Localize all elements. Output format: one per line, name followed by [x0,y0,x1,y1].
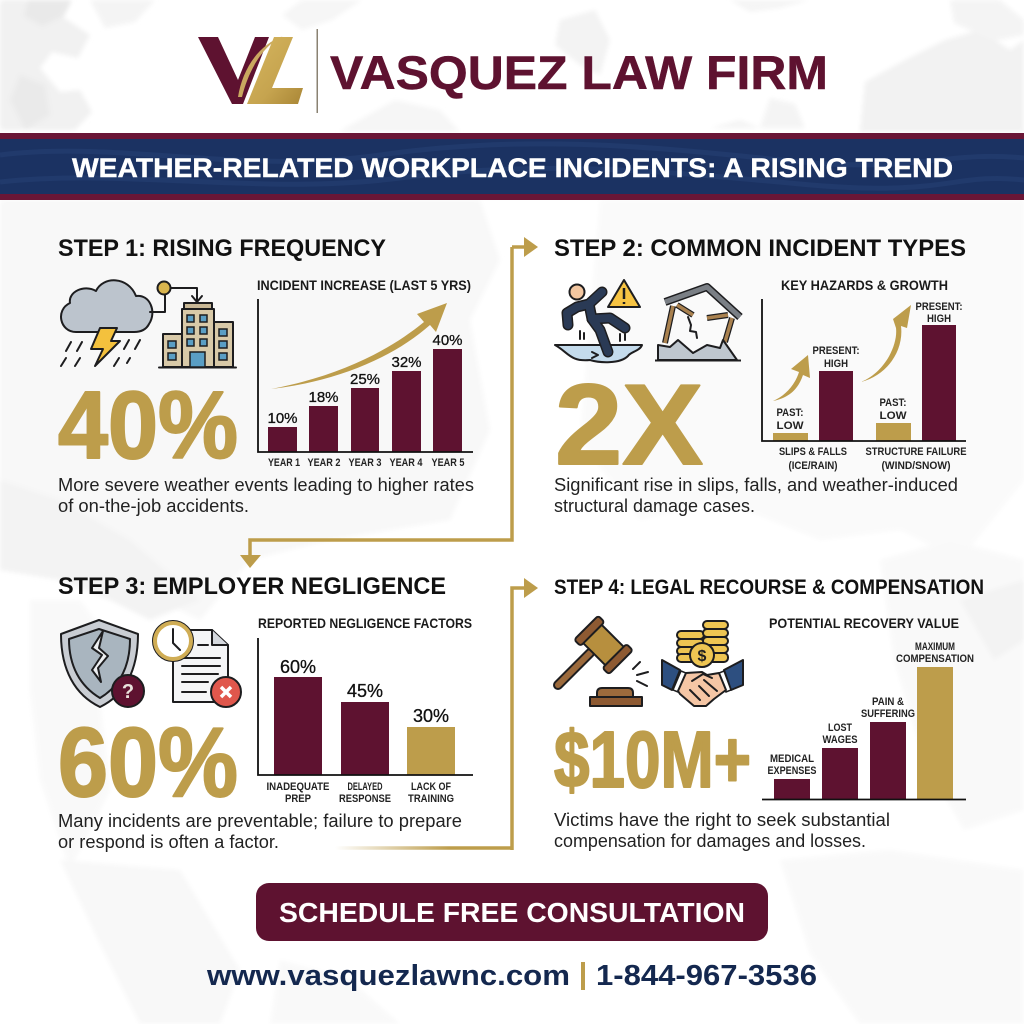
firm name: VASQUEZ LAW FIRM [330,46,828,99]
bar chart: incident increase: 25% [350,371,380,388]
bar chart: negligence factors: RESPONSE [339,793,391,805]
step 3 heading: STEP 3: EMPLOYER NEGLIGENCE [58,573,446,600]
bar chart: recovery value: SUFFERING [861,708,915,720]
logo V [198,37,269,104]
bar chart: recovery value: PAIN & [872,696,904,708]
bar chart: key hazards: STRUCTURE FAILURE [866,446,966,458]
step 2 description: Significant rise in slips, falls, and weather-induced [554,475,958,495]
panel: step 3 [58,573,473,852]
bar chart: key hazards: PAST: [776,407,804,419]
bar chart: key hazards: (WIND/SNOW) [882,460,951,472]
step 3 description: Many incidents are preventable; failure to prepare [58,811,462,831]
step 4 heading: STEP 4: LEGAL RECOURSE & COMPENSATION [554,576,984,599]
step 1 description: More severe weather events leading to higher rates [58,475,474,495]
bar chart: key hazards: HIGH [927,313,951,325]
step 2 description: structural damage cases. [554,496,755,516]
panel: step 4 [554,576,984,851]
icon: cracked shield with question badge [61,620,144,707]
icon: person slipping with warning [555,280,642,362]
icon: coins and handshake [662,621,743,706]
step 2 heading: STEP 2: COMMON INCIDENT TYPES [554,235,966,262]
bar chart: key hazards: PRESENT: [812,345,860,357]
bar chart: negligence factors: 30% [413,706,449,726]
bar chart: negligence factors: TRAINING [408,793,454,805]
bar chart: incident increase: YEAR 5 [432,457,464,469]
flow arrow: step 1 to 2 and 2 to 3 [240,237,538,568]
bar chart: negligence factors: DELAYED [348,781,383,793]
panel: step 2 [554,235,966,516]
chart heading: REPORTED NEGLIGENCE FACTORS [258,615,472,631]
banner title: WEATHER-RELATED WORKPLACE INCIDENTS: A RISING TREND [72,153,953,183]
icon: late document with clock [153,621,241,707]
bar chart: recovery value: MAXIMUM [915,641,955,653]
button label: SCHEDULE FREE CONSULTATION [279,897,745,928]
bar chart: key hazards: HIGH [824,358,848,370]
bar chart: negligence factors [258,638,473,805]
step 4 description: Victims have the right to seek substantial [554,810,890,830]
bar chart: incident increase: YEAR 4 [390,457,423,469]
flow arrow: step 3 to 4 [335,578,538,850]
step 3 description: or respond is often a factor. [58,832,279,852]
bar chart: incident increase: 32% [391,354,422,371]
bar chart: incident increase: YEAR 3 [348,457,382,469]
chart heading: POTENTIAL RECOVERY VALUE [769,615,959,631]
step 4 description: compensation for damages and losses. [554,831,866,851]
icon: coins and handshake: $ [698,648,707,665]
bar chart: key hazards: PRESENT: [916,301,962,313]
bar chart: incident increase: 10% [267,410,298,427]
chart heading: KEY HAZARDS & GROWTH [781,277,948,293]
bar chart: incident increase [258,299,473,469]
icon: cracked shield with question badge: ? [122,681,134,703]
bar chart: recovery value: EXPENSES [768,765,816,777]
bar chart: recovery value: MEDICAL [770,753,814,765]
big stat: 2X [555,362,703,489]
bar chart: negligence factors: PREP [285,793,311,805]
bar chart: negligence factors: 45% [347,681,383,701]
bar chart: key hazards: SLIPS & FALLS [779,446,847,458]
title banner [0,133,1024,200]
bar chart: recovery value: LOST [828,722,852,734]
website and phone: www.vasquezlawnc.com [206,960,570,992]
bar chart: recovery value [762,641,974,800]
bar chart: key hazards: LOW [880,410,907,422]
bar chart: key hazards: PAST: [880,397,906,409]
bar chart: recovery value: COMPENSATION [896,653,974,665]
website and phone: 1-844-967-3536 [596,960,817,992]
big stat: 40% [58,372,238,479]
logo divider [316,29,318,113]
website and phone [206,960,817,992]
logo L [247,37,303,104]
bar chart: key hazards: LOW [776,420,804,432]
big stat: 60% [58,707,238,817]
logo mark [198,36,303,104]
icon: storm cloud over building [61,280,236,368]
icon: gavel [558,616,648,706]
panel: step 1 [58,235,474,516]
step 1 description: of on-the-job accidents. [58,496,249,516]
step 1 heading: STEP 1: RISING FREQUENCY [58,235,386,262]
bar chart: negligence factors: 60% [280,657,316,677]
bar chart: incident increase: YEAR 1 [268,457,300,469]
bar chart: key hazards: (ICE/RAIN) [788,460,838,472]
bar chart: negligence factors: INADEQUATE [266,781,330,793]
call to action button [256,883,768,941]
bar chart: key hazards [762,299,966,472]
bar chart: negligence factors: LACK OF [411,781,451,793]
big stat: $10M+ [554,715,751,804]
logo swoosh [238,36,283,97]
bar chart: incident increase: YEAR 2 [308,457,340,469]
icon: collapsed structure [655,287,741,360]
bar chart: incident increase: 18% [308,389,339,406]
bar chart: recovery value: WAGES [822,734,858,746]
chart heading: INCIDENT INCREASE (LAST 5 YRS) [257,277,471,293]
bar chart: incident increase: 40% [432,332,463,349]
